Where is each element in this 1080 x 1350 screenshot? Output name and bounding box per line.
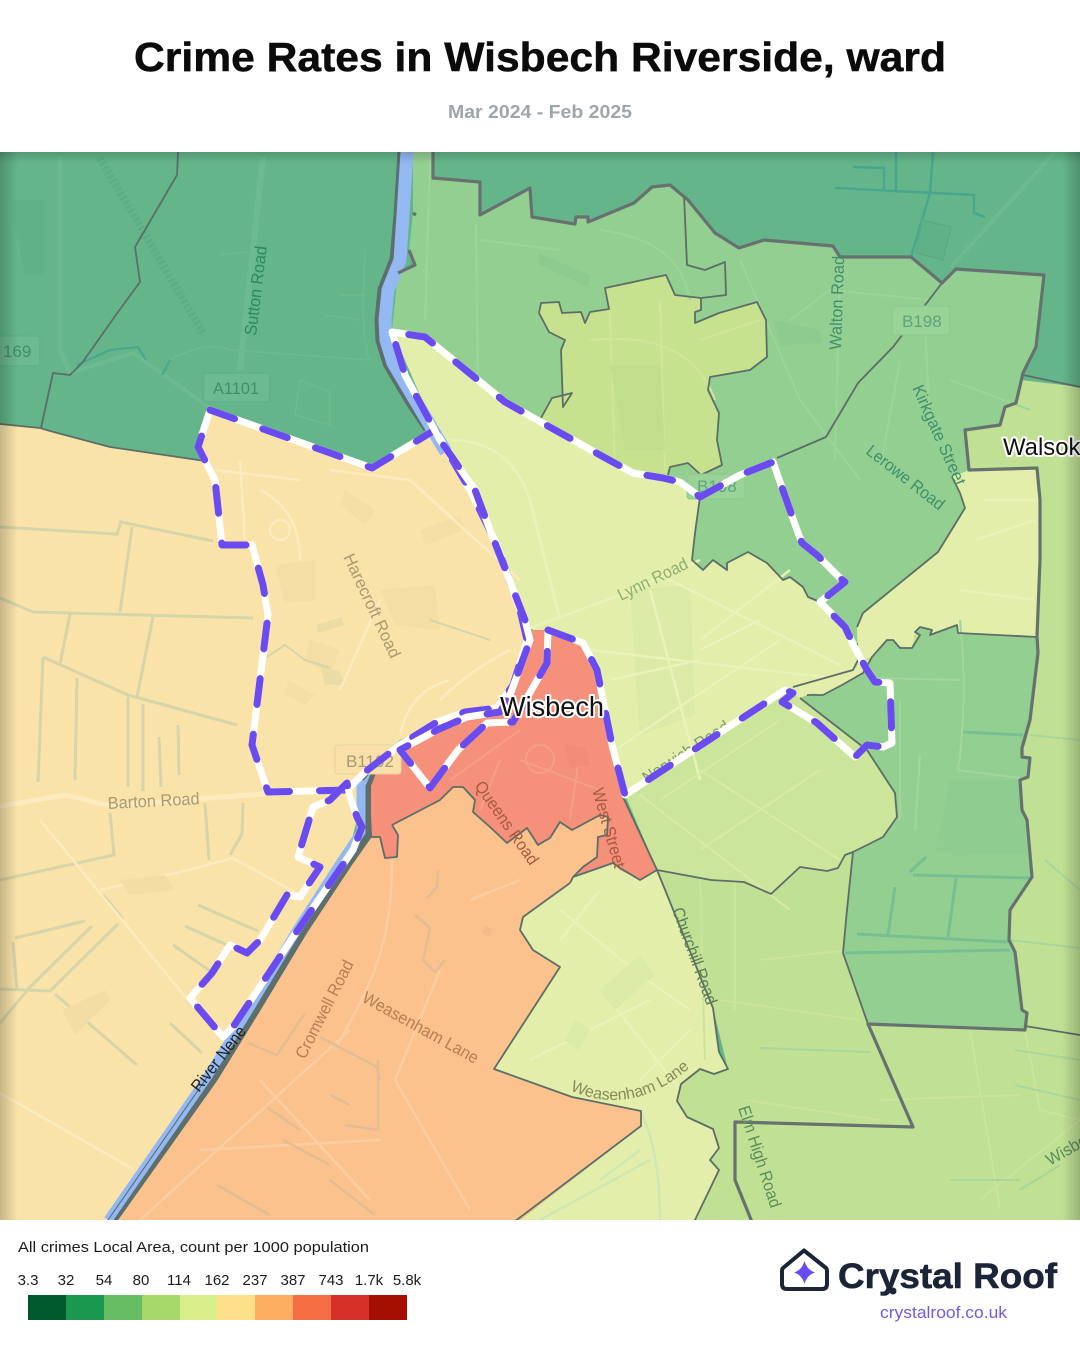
legend values: 743 (318, 1272, 344, 1289)
legend values (18, 1272, 422, 1289)
area: orange streets (140, 860, 520, 1220)
area: narrow yellow strip (785, 660, 870, 698)
legend values: 54 (96, 1272, 112, 1289)
legend title: All crimes Local Area, count per 1000 population (18, 1239, 369, 1256)
place label: Wisbech: Wisbech (500, 691, 604, 722)
road shield: 169: 169 (3, 342, 31, 361)
street labels: Kirkgate Street (908, 382, 970, 489)
legend values: 237 (242, 1272, 268, 1289)
street labels: Queens Road (471, 777, 542, 869)
road shield: 169 (0, 336, 40, 366)
road shield: B1102 (335, 745, 401, 774)
subtitle: date range: Mar 2024 - Feb 2025 (448, 102, 632, 122)
street labels: Lynn Road (614, 554, 691, 605)
legend values: 3.3 (18, 1272, 38, 1289)
legend colour scale (28, 1295, 407, 1320)
title: Crime Rates in Wisbech Riverside, ward (134, 34, 946, 80)
street labels: West Street (588, 786, 629, 870)
street labels: Elm High Road (734, 1103, 785, 1210)
area: north-east ditches (835, 152, 986, 260)
area: town centre streets (450, 730, 600, 820)
area: south-west orange (108, 787, 641, 1225)
area: south-east field ditches (845, 620, 1030, 953)
river: Nene south reach (108, 762, 375, 1220)
road shield: A1101: A1101 (213, 379, 259, 398)
road shield: B198 ward edge (687, 474, 745, 499)
area: south yellow streets (530, 890, 690, 1220)
road shield: A1101 (203, 373, 270, 402)
logo (782, 1250, 1057, 1322)
legend values: 387 (280, 1272, 306, 1289)
river: Nene north reach (382, 152, 446, 452)
area: central east lobe (625, 690, 897, 894)
area boundaries (0, 152, 1080, 1222)
legend values: 114 (167, 1272, 191, 1289)
legend values: 80 (133, 1272, 149, 1289)
area: south-east green (656, 380, 1080, 1220)
area: tan ward streets and buildings (215, 460, 520, 735)
road shield: B198 north: B198 (902, 312, 942, 331)
ward outline: western section (198, 410, 527, 792)
area: east light yellow-green (857, 468, 1040, 660)
street labels: Walton Road (826, 256, 848, 350)
logo wordmark: Crystal Roof (838, 1257, 1057, 1296)
area: inner north light green (539, 275, 767, 475)
street labels: Norwich Road (639, 717, 733, 787)
legend values: 162 (204, 1272, 230, 1289)
street labels: Churchill Road (668, 905, 721, 1007)
area: south light yellow-green (494, 863, 728, 1225)
legend values: 32 (58, 1272, 74, 1289)
street labels: Weasenham Lane (359, 988, 482, 1068)
street labels: Lerowe Road (863, 441, 948, 514)
street labels: Barton Road (107, 789, 200, 813)
area: north green (392, 152, 1044, 660)
road shield: B198 north (892, 306, 950, 335)
area: north roads (425, 160, 1030, 480)
legend values: 1.7k (355, 1272, 384, 1289)
area: north-west road and rail details (40, 152, 203, 428)
ward outline: south-west parcel (190, 783, 362, 1037)
street labels: Weasenham Lane (573, 1062, 688, 1100)
ward outline: eastern section (392, 332, 892, 795)
map (0, 152, 1080, 1220)
area: west tan (0, 410, 527, 1225)
area: south-east roads and ditches (640, 720, 1080, 1210)
area: west field ditches (0, 522, 300, 1169)
road shield: B1102: B1102 (346, 752, 394, 771)
street labels: Cromwell Road (292, 957, 358, 1062)
street labels (108, 246, 1080, 1208)
area: town centre red (363, 630, 657, 880)
street labels: Harecroft Road (339, 551, 404, 661)
street labels: Sutton Road (241, 245, 271, 336)
legend values: 5.8k (393, 1272, 422, 1289)
road shield: B198 ward edge: B198 (697, 477, 737, 496)
river label: River Nene (187, 1022, 250, 1095)
area: Lynn Road streets and park (450, 440, 850, 780)
area: south-east medium green (800, 625, 1038, 1030)
icon: house with star (782, 1250, 827, 1289)
area: Lynn Road light yellow-green (392, 330, 858, 795)
website url: crystalroof.co.uk (880, 1304, 1008, 1322)
legend (18, 1239, 422, 1320)
